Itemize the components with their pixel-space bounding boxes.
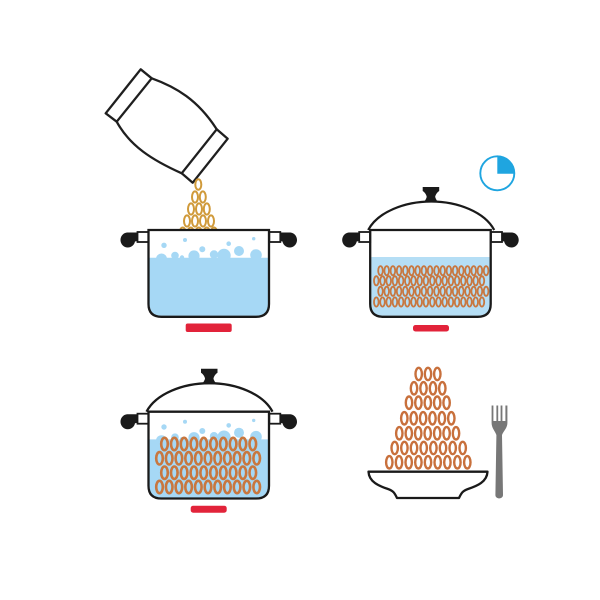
falling dry pasta xyxy=(180,178,218,229)
heat indicator: low xyxy=(413,325,449,332)
icon: pasta bag pouring xyxy=(106,69,228,183)
cooked pasta rows xyxy=(374,266,488,307)
icon: quarter timer xyxy=(480,156,514,190)
panel: pot with boiling pasta xyxy=(120,369,297,513)
pasta mound xyxy=(386,368,470,468)
calm water xyxy=(371,257,490,316)
icon: fork xyxy=(492,406,507,498)
heat indicator: high xyxy=(186,324,232,332)
swollen pasta rows xyxy=(156,438,260,493)
panel: pot of boiling water xyxy=(120,230,297,332)
panel: covered pot with pasta simmering xyxy=(342,187,519,332)
plate xyxy=(368,472,488,498)
heat indicator: low xyxy=(191,506,227,513)
plate of pasta xyxy=(368,368,488,498)
